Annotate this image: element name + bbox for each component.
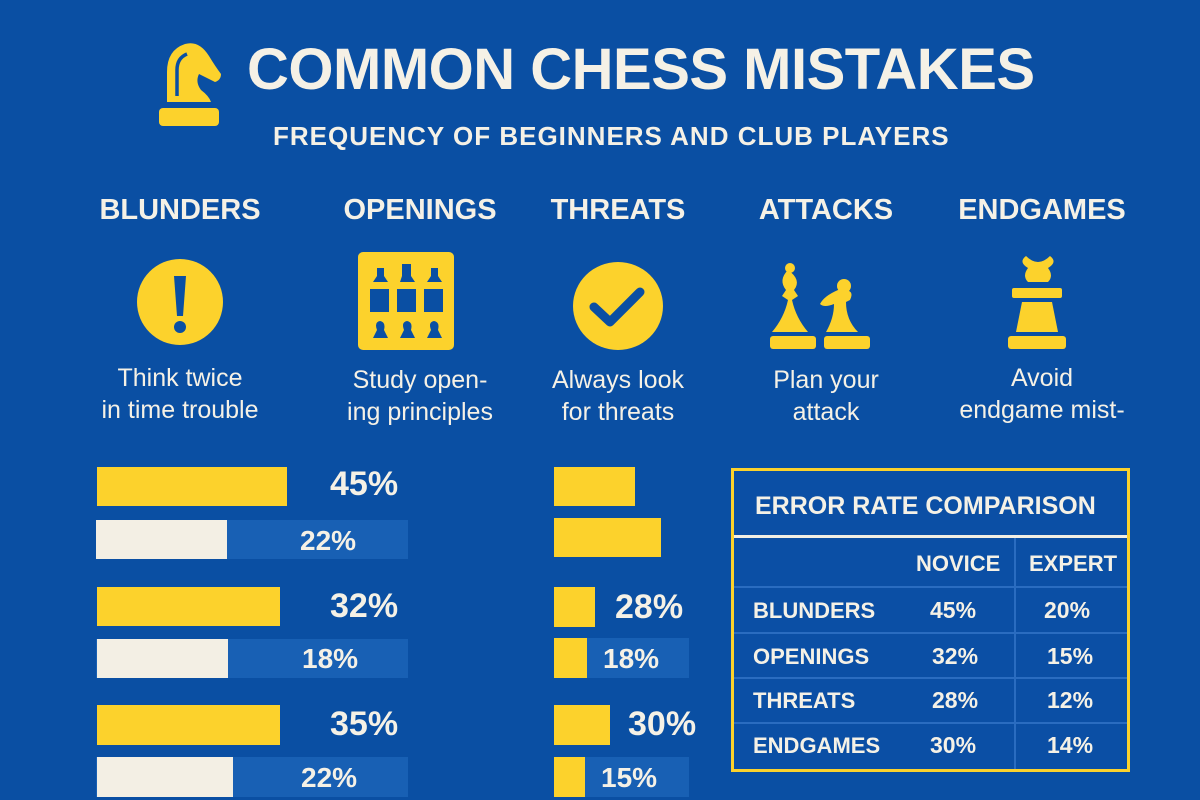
- bar chart: middle: 18%: [603, 643, 659, 674]
- column: openings: OPENINGS: [343, 194, 497, 226]
- bar chart: left: 45%: [330, 465, 398, 503]
- bar chart: middle: 28%: [615, 588, 683, 626]
- bar chart: left: [96, 465, 408, 797]
- icon: knight: [159, 43, 221, 126]
- column: blunders: in time trouble: [101, 396, 259, 424]
- column: endgames: endgame mist-: [959, 396, 1125, 424]
- table: error rate comparison: 15%: [1047, 643, 1093, 669]
- table: error rate comparison: 32%: [932, 643, 978, 669]
- column: blunders: Think twice: [117, 364, 243, 392]
- bar chart: left: 18%: [302, 643, 358, 674]
- table: error rate comparison: ENDGAMES: [753, 733, 880, 758]
- title: COMMON CHESS MISTAKES: [247, 37, 1035, 102]
- table: error rate comparison: 14%: [1047, 732, 1093, 758]
- column: threats: [550, 194, 685, 426]
- column: openings: ing principles: [347, 398, 493, 426]
- bar chart: left: 35%: [330, 705, 398, 743]
- bar chart: left: 22%: [301, 762, 357, 793]
- column: endgames: Avoid: [1011, 364, 1073, 392]
- table: error rate comparison: [731, 468, 1130, 772]
- table: error rate comparison: 30%: [930, 732, 976, 758]
- column: threats: for threats: [562, 398, 674, 426]
- table: error rate comparison: THREATS: [753, 688, 855, 713]
- column: attacks: [759, 194, 893, 426]
- icon: king: [1008, 256, 1066, 349]
- table: error rate comparison: ERROR RATE COMPARISON: [755, 492, 1096, 520]
- icon: exclamation: [137, 259, 223, 345]
- table: error rate comparison: EXPERT: [1029, 551, 1117, 576]
- column: threats: THREATS: [551, 194, 685, 226]
- column: attacks: ATTACKS: [759, 194, 893, 226]
- bar chart: middle: 15%: [601, 762, 657, 793]
- table: error rate comparison: 45%: [930, 597, 976, 623]
- bar chart: left: 32%: [330, 587, 398, 625]
- subtitle: FREQUENCY OF BEGINNERS AND CLUB PLAYERS: [273, 121, 950, 151]
- table: error rate comparison: OPENINGS: [753, 644, 869, 669]
- table: error rate comparison: 28%: [932, 687, 978, 713]
- column: openings: [343, 194, 497, 426]
- column: blunders: [99, 194, 261, 424]
- column: blunders: BLUNDERS: [99, 194, 261, 226]
- column: endgames: ENDGAMES: [958, 194, 1126, 226]
- icon: board: [358, 252, 454, 350]
- icon: check: [573, 262, 663, 350]
- table: error rate comparison: NOVICE: [916, 551, 1000, 576]
- column: endgames: [958, 194, 1126, 424]
- column: openings: Study open-: [353, 366, 487, 394]
- icon: bishop and knight: [770, 263, 870, 349]
- bar chart: left: 22%: [300, 525, 356, 556]
- table: error rate comparison: BLUNDERS: [753, 598, 875, 623]
- column: threats: Always look: [552, 366, 684, 394]
- column: attacks: attack: [793, 398, 859, 426]
- table: error rate comparison: 20%: [1044, 597, 1090, 623]
- bar chart: middle: [554, 467, 696, 797]
- column: attacks: Plan your: [773, 366, 879, 394]
- bar chart: middle: 30%: [628, 705, 696, 743]
- table: error rate comparison: 12%: [1047, 687, 1093, 713]
